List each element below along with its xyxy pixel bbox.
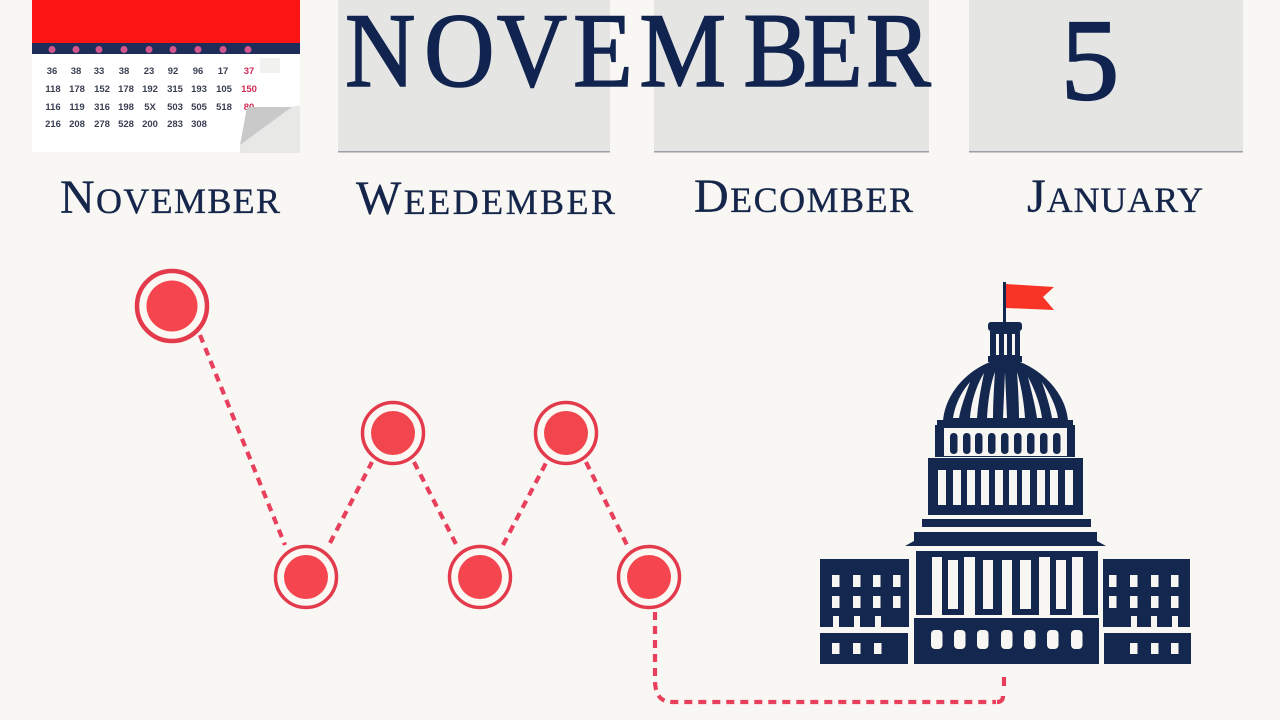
timeline node 3 [362, 402, 424, 464]
calendar navy binding strip with rings [32, 43, 300, 54]
calendar date grid: 178 [118, 84, 134, 95]
calendar date grid: 505 [191, 102, 208, 113]
icon: capitol building [820, 282, 1191, 664]
calendar date grid: 119 [69, 102, 85, 113]
calendar date grid: 116 [45, 102, 61, 113]
timeline node 6 [618, 546, 680, 608]
calendar date grid: 208 [69, 119, 85, 130]
calendar date grid: 308 [191, 119, 207, 130]
capitol left wing [820, 559, 909, 664]
calendar date grid: 37 [244, 66, 254, 77]
label: November: NOVEMBER [60, 171, 280, 224]
calendar date grid [45, 66, 257, 130]
calendar date grid: 192 [142, 84, 158, 95]
calendar date grid: 528 [118, 119, 134, 130]
timeline node 1 [137, 271, 207, 341]
calendar date grid: 38 [119, 66, 129, 77]
calendar date grid: 105 [216, 84, 233, 95]
panel: grey date card 2 [654, 0, 929, 152]
capitol right wing [1103, 559, 1191, 664]
panel: calendar page [32, 0, 300, 153]
label: January: JANUARY [1027, 170, 1203, 223]
calendar date grid: 96 [193, 66, 203, 77]
calendar date grid: 80 [244, 102, 254, 113]
calendar date grid: 5X [144, 102, 156, 113]
timeline: dashed connectors [200, 335, 1004, 702]
title: day number: 5 [1061, 0, 1119, 125]
calendar date grid: 178 [69, 84, 85, 95]
calendar date grid: 518 [216, 102, 232, 113]
calendar date grid: 92 [168, 66, 178, 77]
calendar date grid: 36 [47, 66, 57, 77]
icon: red flag [1003, 282, 1054, 323]
calendar date grid: 316 [94, 102, 110, 113]
calendar date grid: 216 [45, 119, 61, 130]
calendar date grid: 193 [191, 84, 207, 95]
capitol central portico [916, 551, 1098, 616]
label: Weedember: WEEDEMBER [356, 172, 615, 225]
calendar date grid: 38 [71, 66, 81, 77]
timeline node 4 [450, 546, 510, 608]
calendar date grid: 152 [94, 84, 110, 95]
panel: grey date card 1 [338, 0, 610, 152]
calendar date grid: 503 [167, 102, 183, 113]
calendar red header [32, 0, 300, 43]
capitol dome [935, 322, 1075, 457]
calendar date grid: 17 [218, 66, 228, 77]
calendar date grid: 200 [142, 119, 158, 130]
calendar page curl [240, 58, 300, 153]
calendar date grid: 198 [118, 102, 134, 113]
capitol cornice [905, 519, 1106, 546]
timeline node 2 [276, 546, 336, 608]
calendar date grid: 278 [94, 119, 110, 130]
calendar date grid: 33 [94, 66, 104, 77]
calendar date grid: 283 [167, 119, 183, 130]
label: Decomber: DECOMBER [694, 170, 913, 223]
calendar date grid: 23 [144, 66, 154, 77]
calendar date grid: 150 [241, 84, 257, 95]
timeline node 5 [536, 402, 596, 464]
calendar date grid: 118 [45, 84, 61, 95]
panel: grey date card 3 [969, 0, 1243, 152]
capitol lower central block [914, 618, 1099, 664]
calendar date grid: 315 [167, 84, 184, 95]
capitol colonnade drum [928, 458, 1083, 515]
